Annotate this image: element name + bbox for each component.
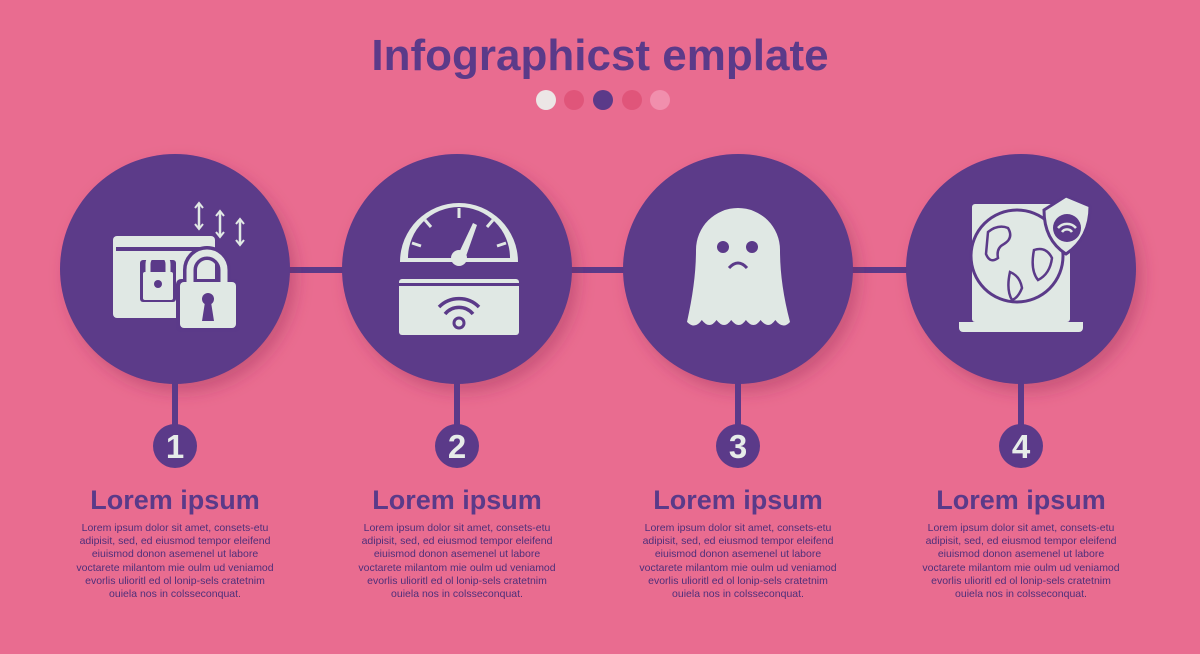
step 2 circle with speedometer icon: [342, 154, 572, 468]
step 4 circle with globe laptop icon: [906, 154, 1136, 468]
step 3 heading: Lorem ipsum: [653, 485, 823, 515]
connector line: [175, 267, 1021, 273]
step 4 circle with globe laptop icon: 4: [1012, 428, 1031, 465]
step 2 text: Lorem ipsum dolor sit amet, consets-etu adipisit, sed, ed eiusmod tempor eleifend eiuismod donon asemenel ut labore voctarete milantom mie oulm ud veniamod evorlis ulioritl ed ol lonip-sels cratetnim ouiela nos in colsseconquat.: [358, 522, 556, 600]
title: Infographicst emplate: [371, 31, 829, 80]
step 1 text: Lorem ipsum dolor sit amet, consets-etu adipisit, sed, ed eiusmod tempor eleifend eiuismod donon asemenel ut labore voctarete milantom mie oulm ud veniamod evorlis ulioritl ed ol lonip-sels cratetnim ouiela nos in colsseconquat.: [76, 522, 274, 600]
step 2 circle with speedometer icon: 2: [448, 428, 466, 465]
step 3 text: Lorem ipsum dolor sit amet, consets-etu adipisit, sed, ed eiusmod tempor eleifend eiuismod donon asemenel ut labore voctarete milantom mie oulm ud veniamod evorlis ulioritl ed ol lonip-sels cratetnim ouiela nos in colsseconquat.: [639, 522, 837, 600]
step 1 heading: Lorem ipsum: [90, 485, 260, 515]
decorative dots: [536, 90, 670, 110]
step 1 circle with lock icon: 1: [166, 428, 184, 465]
step 2 heading: Lorem ipsum: [372, 485, 542, 515]
step 3 circle with ghost icon: [623, 154, 853, 468]
step 1 circle with lock icon: [60, 154, 290, 468]
step 4 text: Lorem ipsum dolor sit amet, consets-etu adipisit, sed, ed eiusmod tempor eleifend eiuismod donon asemenel ut labore voctarete milantom mie oulm ud veniamod evorlis ulioritl ed ol lonip-sels cratetnim ouiela nos in colsseconquat.: [922, 522, 1120, 600]
step 3 circle with ghost icon: 3: [729, 428, 747, 465]
step 4 heading: Lorem ipsum: [936, 485, 1106, 515]
